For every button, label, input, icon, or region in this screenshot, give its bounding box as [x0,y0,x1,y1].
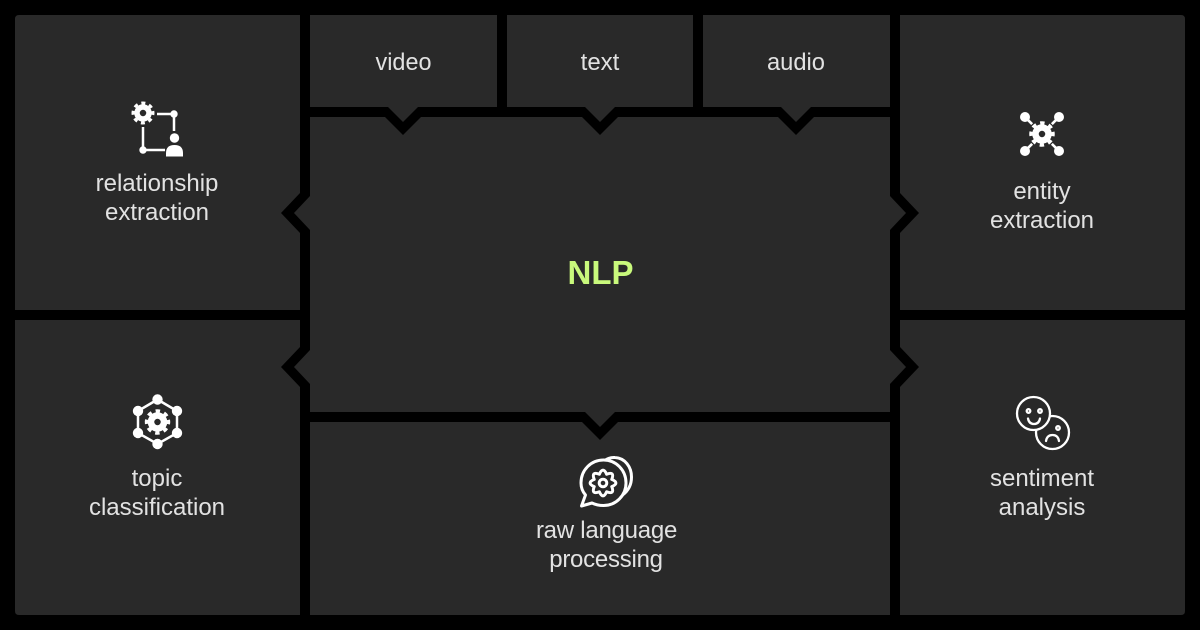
icon: entity extraction [1020,112,1064,156]
panel: video input [310,15,497,122]
label: topic classification: topic [132,465,182,492]
heading: NLP: NLP [568,254,634,291]
panel: audio input [703,15,890,122]
panel: relationship extraction [15,15,300,310]
panel: raw language processing [310,422,890,615]
label: entity extraction: extraction [990,207,1094,234]
icon: relationship extraction [131,101,183,156]
label: relationship extraction: extraction [105,199,209,226]
label: raw language processing: raw language [536,517,677,544]
icon: sentiment analysis [1017,397,1069,449]
label: audio: audio [767,49,825,76]
panel: NLP centre [294,117,906,427]
panel: sentiment analysis [900,320,1185,615]
label: raw language processing: processing [549,546,663,573]
panel: text input [507,15,693,122]
label: relationship extraction: relationship [96,170,218,197]
icon: topic classification [133,394,182,449]
label: topic classification: classification [89,494,225,521]
icon: raw language processing [581,457,632,506]
label: sentiment analysis: sentiment [990,465,1094,492]
panel: entity extraction [900,15,1185,310]
panel: topic classification [15,320,300,615]
label: text: text [581,49,620,76]
label: entity extraction: entity [1013,178,1071,205]
label: sentiment analysis: analysis [999,494,1085,521]
label: video: video [376,49,432,76]
